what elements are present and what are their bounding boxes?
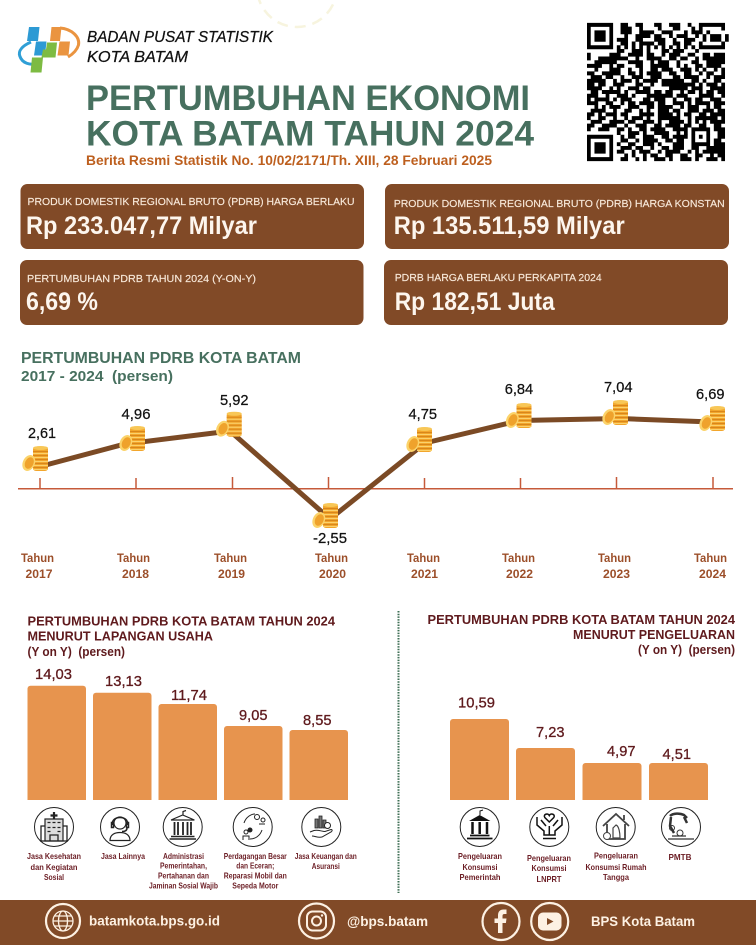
organisation name: KOTA BATAM: [87, 49, 188, 66]
icon: hands and heart: [530, 808, 569, 846]
title: PERTUMBUHAN EKONOMI: [86, 79, 530, 118]
line chart: -2,55: [313, 530, 347, 547]
bar chart: lapangan usaha: 8,55: [303, 712, 332, 729]
bar chart: pengeluaran: 4,51: [662, 746, 691, 763]
heading: pengeluaran: (Y on Y) (persen): [638, 643, 735, 657]
captions: pengeluaran: Konsumsi: [532, 863, 566, 873]
panel: PDRB perkapita: Rp 182,51 Juta: [395, 288, 556, 316]
panel: PDRB harga konstan: Rp 135.511,59 Milyar: [394, 212, 625, 240]
captions: pengeluaran: Pengeluaran: [527, 853, 571, 863]
heading: lapangan usaha: (Y on Y) (persen): [28, 645, 125, 659]
heading: pengeluaran: MENURUT PENGELUARAN: [573, 628, 735, 642]
captions: pengeluaran: Konsumsi Rumah: [586, 862, 646, 872]
panel: PDRB perkapita: [384, 260, 728, 325]
footer: [0, 900, 756, 945]
bar chart: pengeluaran: 10,59: [458, 695, 495, 712]
bar chart: pengeluaran: 4,97: [607, 743, 636, 760]
heading: line chart: 2017 - 2024 (persen): [21, 368, 173, 385]
line chart: 7,04: [604, 379, 632, 396]
panel: PDRB harga berlaku: PRODUK DOMESTIK REGIONAL BRUTO (PDRB) HARGA BERLAKU: [28, 196, 354, 208]
panel: pertumbuhan PDRB: 6,69 %: [26, 288, 98, 316]
panel: PDRB harga konstan: PRODUK DOMESTIK REGIONAL BRUTO (PDRB) HARGA KONSTAN: [394, 198, 725, 210]
icon: robot arm: [662, 808, 700, 846]
icon: facebook: [482, 903, 520, 940]
captions: lapangan usaha: dan Eceran;: [236, 860, 274, 870]
bar chart: lapangan usaha: 13,13: [105, 673, 142, 690]
panel: PDRB harga konstan: [385, 184, 729, 249]
captions: lapangan usaha: Jasa Kesehatan: [27, 851, 81, 861]
captions: pengeluaran: Pemerintah: [460, 872, 500, 882]
captions: lapangan usaha: Sosial: [44, 872, 64, 882]
line chart: 2019: [218, 567, 245, 581]
heading: pengeluaran: PERTUMBUHAN PDRB KOTA BATAM TAHUN 2024: [428, 613, 735, 627]
icon: government consumption: [460, 808, 499, 846]
captions: lapangan usaha: Reparasi Mobil dan: [224, 870, 287, 880]
bar chart: lapangan usaha: [28, 666, 348, 800]
bar chart: pengeluaran: 7,23: [536, 724, 564, 741]
QR code: [587, 25, 729, 159]
panel: pertumbuhan PDRB: [20, 260, 364, 325]
line chart: Tahun: [598, 551, 631, 565]
line chart: 2018: [122, 567, 149, 581]
line chart: 6,69: [696, 386, 724, 403]
logo: BPS: [19, 27, 79, 72]
line chart: 2020: [319, 567, 346, 581]
captions: lapangan usaha: Administrasi: [163, 851, 204, 861]
heading: lapangan usaha: PERTUMBUHAN PDRB KOTA BATAM TAHUN 2024: [28, 615, 335, 629]
line chart: [18, 379, 733, 581]
organisation name: [87, 29, 274, 66]
line chart: Tahun: [407, 551, 440, 565]
heading: pengeluaran: [428, 613, 735, 657]
subtitle: Berita Resmi Statistik No. 10/02/2171/Th. XIII, 28 Februari 2025: [86, 153, 492, 168]
captions: lapangan usaha: Pemerintahan,: [160, 860, 207, 870]
panel: PDRB harga berlaku: Rp 233.047,77 Milyar: [26, 212, 257, 240]
icon: hospital: [34, 808, 74, 846]
icon: globe: [46, 904, 80, 938]
icon: instagram: [299, 904, 334, 938]
title: KOTA BATAM TAHUN 2024: [86, 114, 535, 154]
icon: government building: [163, 808, 202, 846]
line chart: 5,92: [220, 392, 248, 409]
captions: pengeluaran: Tangga: [603, 872, 629, 882]
panel: pertumbuhan PDRB: PERTUMBUHAN PDRB TAHUN 2024 (Y-ON-Y): [27, 273, 256, 285]
line chart: 6,84: [505, 381, 533, 398]
icon: house: [596, 808, 635, 846]
icon: youtube: [531, 903, 568, 940]
line chart: 2017: [26, 567, 53, 581]
captions: pengeluaran: Pengeluaran: [458, 851, 502, 861]
bar chart: lapangan usaha: 14,03: [35, 666, 72, 683]
line chart: Tahun: [21, 551, 54, 565]
bar chart: pengeluaran: [450, 695, 708, 800]
captions: lapangan usaha: Perdagangan Besar: [224, 851, 287, 861]
captions: pengeluaran: Pengeluaran: [594, 850, 638, 860]
icon: trade: [233, 808, 272, 846]
heading: line chart: PERTUMBUHAN PDRB KOTA BATAM: [21, 350, 301, 367]
captions: lapangan usaha: Pertahanan dan: [158, 870, 209, 880]
organisation name: BADAN PUSAT STATISTIK: [87, 29, 274, 46]
icon: finance: [302, 808, 341, 846]
title: [86, 79, 535, 154]
captions: lapangan usaha: Asuransi: [312, 861, 340, 871]
footer: @bps.batam: [347, 913, 428, 929]
line chart: 4,96: [122, 406, 150, 423]
icon: person with headset: [100, 808, 140, 846]
captions: lapangan usaha: Sepeda Motor: [232, 880, 279, 890]
captions: pengeluaran: [458, 850, 692, 884]
bar chart: lapangan usaha: 11,74: [171, 687, 207, 704]
line chart: 4,75: [408, 406, 437, 423]
captions: lapangan usaha: Jasa Keuangan dan: [295, 851, 357, 861]
footer: BPS Kota Batam: [591, 913, 695, 929]
heading: line chart: [21, 350, 301, 385]
captions: lapangan usaha: Jasa Lainnya: [101, 851, 145, 861]
line chart: Tahun: [214, 551, 247, 565]
line chart: Tahun: [694, 551, 727, 565]
captions: lapangan usaha: Jaminan Sosial Wajib: [149, 880, 218, 890]
panel: PDRB harga berlaku: [20, 184, 364, 249]
line chart: Tahun: [502, 551, 535, 565]
heading: lapangan usaha: MENURUT LAPANGAN USAHA: [28, 630, 213, 644]
panel: PDRB perkapita: PDRB HARGA BERLAKU PERKAPITA 2024: [395, 272, 602, 284]
line chart: 2022: [506, 567, 533, 581]
captions: pengeluaran: LNPRT: [536, 874, 562, 884]
footer: batamkota.bps.go.id: [89, 912, 220, 928]
bar chart: lapangan usaha: 9,05: [239, 707, 268, 724]
line chart: 2021: [411, 567, 438, 581]
line chart: 2,61: [28, 425, 56, 442]
line chart: 2023: [603, 567, 630, 581]
line chart: Tahun: [117, 551, 150, 565]
line chart: Tahun: [315, 551, 348, 565]
captions: pengeluaran: Konsumsi: [462, 862, 498, 872]
line chart: 2024: [699, 567, 726, 581]
captions: lapangan usaha: dan Kegiatan: [30, 862, 78, 872]
heading: lapangan usaha: [28, 615, 335, 659]
captions: pengeluaran: PMTB: [668, 852, 692, 862]
captions: lapangan usaha: [27, 851, 357, 890]
